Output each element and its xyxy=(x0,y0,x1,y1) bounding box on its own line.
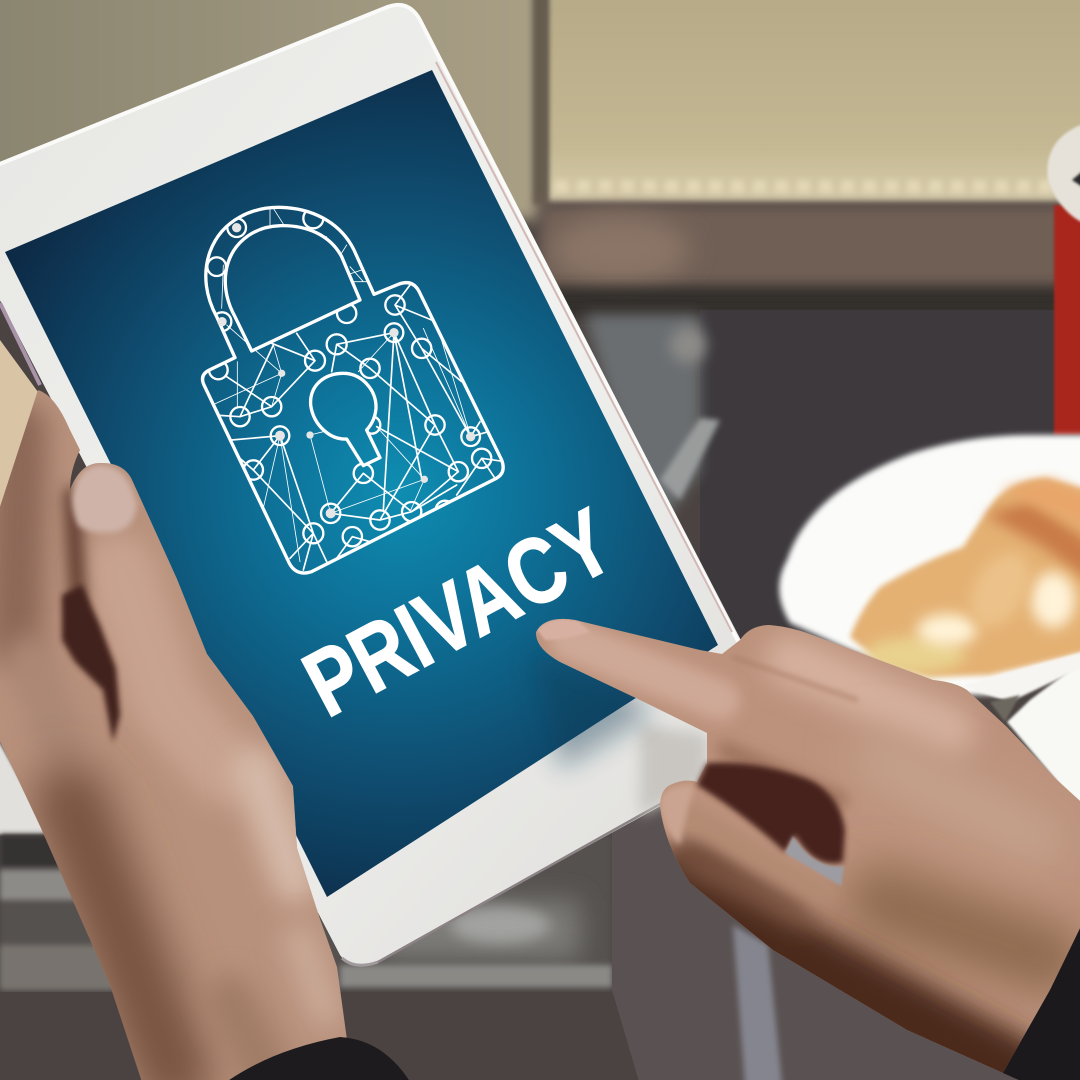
keyhole xyxy=(311,373,380,466)
plate with croissant xyxy=(779,435,1080,722)
left sleeve xyxy=(222,1037,412,1080)
padlock icon xyxy=(203,205,505,573)
right hand shading xyxy=(570,640,1050,1075)
lock outline xyxy=(203,207,503,573)
tablet screen xyxy=(5,70,718,897)
left hand xyxy=(0,380,360,1080)
node centres xyxy=(217,223,475,518)
finger shadow on screen xyxy=(530,650,650,770)
red cup xyxy=(1047,122,1080,435)
crease between fingers xyxy=(62,585,120,742)
table visible between fingers xyxy=(785,836,844,886)
network inside lock xyxy=(205,205,505,570)
PRIVACY heading: PRIVACY xyxy=(287,488,630,737)
notebook under tablet xyxy=(0,835,612,990)
right sleeve xyxy=(1003,918,1080,1080)
right hand xyxy=(530,610,1080,1080)
thumb nail xyxy=(72,465,137,533)
left hand shading xyxy=(15,430,325,1080)
tablet body xyxy=(0,5,790,965)
lower plate xyxy=(1007,655,1080,815)
curled finger tip xyxy=(660,785,695,845)
fingertip nail xyxy=(537,619,590,640)
dark gap between fingers xyxy=(697,763,845,863)
